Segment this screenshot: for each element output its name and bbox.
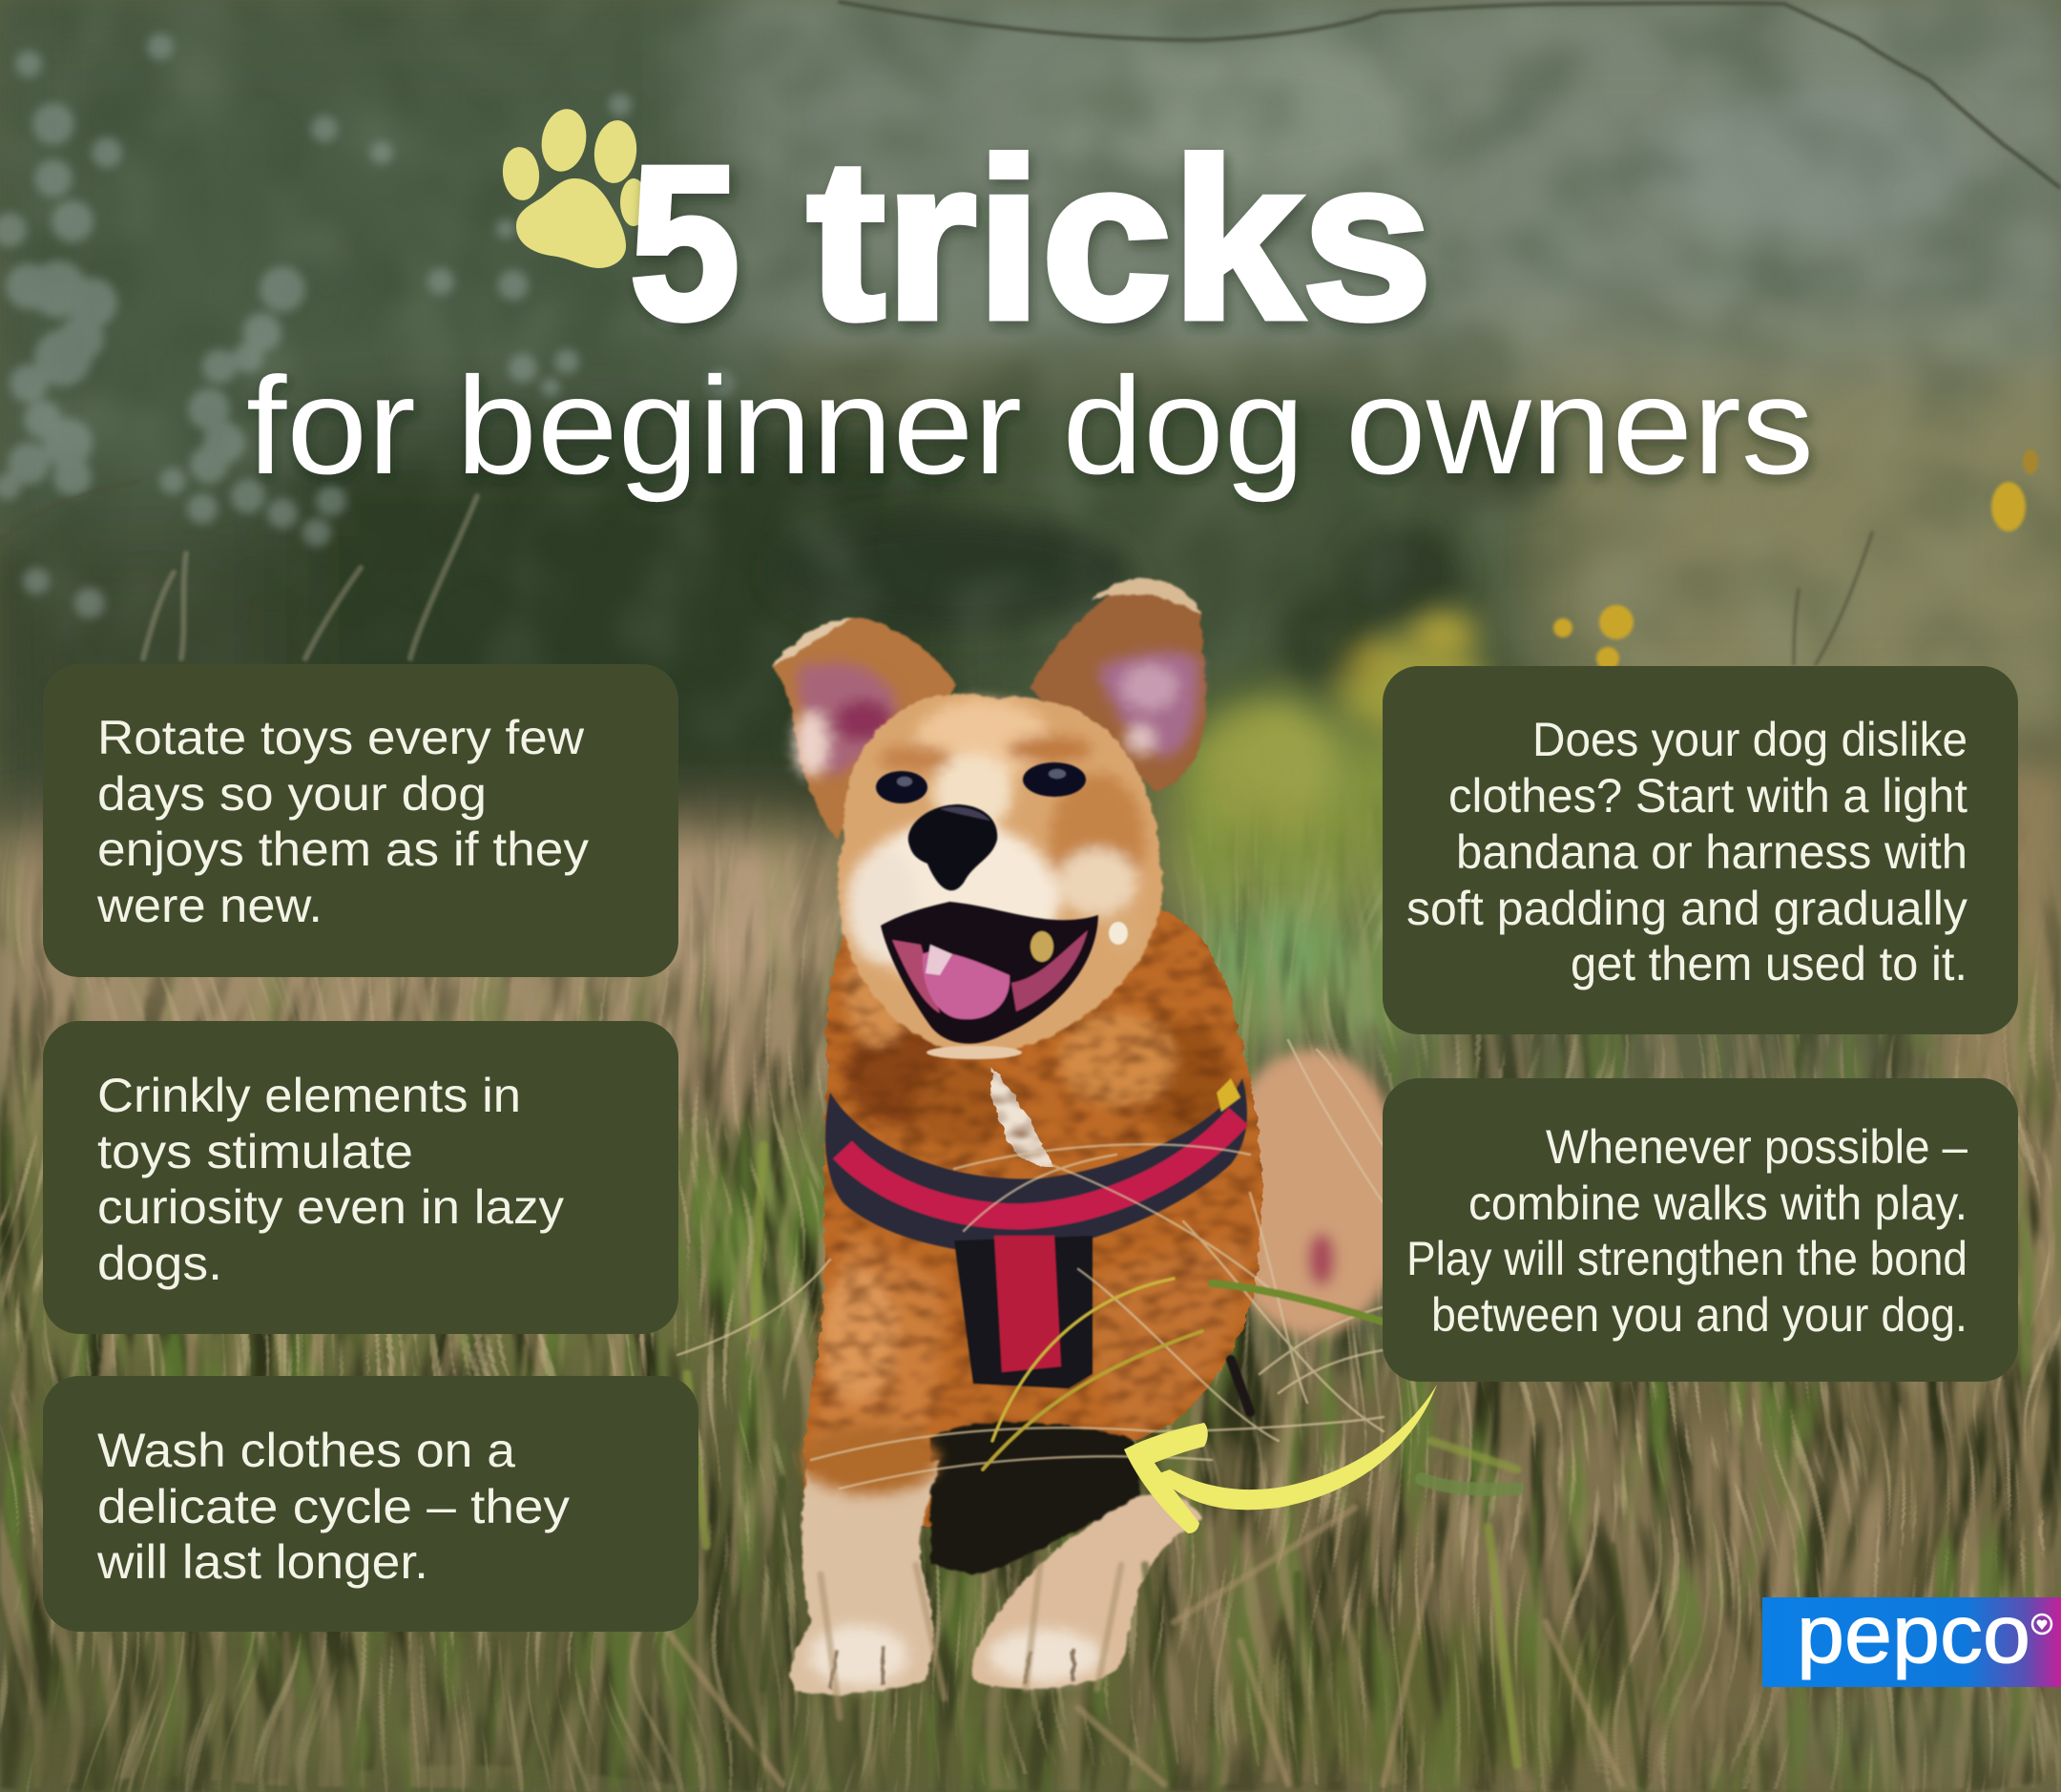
text: tip 3: Wash clothes on a: [97, 1424, 515, 1477]
text: tip 2: Crinkly elements in: [97, 1069, 521, 1122]
logo: pepco: [1762, 1589, 2061, 1687]
decorative twigs and flowers: [0, 2, 2059, 670]
foreground grass: [668, 1145, 1641, 1784]
text: tip 1: enjoys them as if they: [97, 823, 589, 876]
dog head: [838, 694, 1162, 1054]
text: tip 2: toys stimulate: [97, 1125, 413, 1178]
text: tip 4: clothes? Start with a light: [1448, 769, 1967, 823]
dog photo: [772, 577, 1407, 1695]
decorative meadow grass texture: [0, 782, 2061, 1792]
dog hind body: [1217, 1050, 1407, 1336]
decorative bokeh: [0, 33, 734, 618]
text: tip 5: combine walks with play.: [1468, 1177, 1967, 1230]
title: 5 tricks: 5: [630, 122, 739, 365]
icon: paw print: [500, 106, 647, 268]
dog mouth and tongue: [881, 902, 1128, 1059]
text: tip 5: Whenever possible –: [1546, 1120, 1967, 1174]
panel: tip 1 rotate toys: [43, 664, 678, 977]
text: tip 3: delicate cycle – they: [97, 1480, 570, 1533]
dog nose: [908, 804, 997, 890]
panel: tip 3 wash clothes: [43, 1376, 698, 1632]
text: tip 1: days so your dog: [97, 767, 487, 821]
text: tip 1: Rotate toys every few: [97, 711, 585, 764]
text: tip 2: curiosity even in lazy: [97, 1180, 564, 1234]
panel: tip 2 crinkly elements: [43, 1021, 678, 1334]
text: tip 4: Does your dog dislike: [1532, 713, 1967, 766]
text: tip 5: Play will strengthen the bond: [1406, 1232, 1967, 1285]
foreground thin grass stems: [677, 1040, 1517, 1490]
text: tip 2: dogs.: [97, 1237, 222, 1290]
dog harness: [825, 1078, 1247, 1388]
dog ears: [772, 577, 1206, 840]
text: tip 5: between you and your dog.: [1431, 1288, 1967, 1342]
arrow: yellow curved arrow pointing at dog: [1124, 1385, 1437, 1533]
title: 5 tricks: tricks: [807, 114, 1432, 366]
text: tip 1: were new.: [96, 879, 323, 932]
dog body: [804, 906, 1262, 1527]
dog legs and paws: [791, 1422, 1202, 1695]
panel: tip 4 dog clothes: [1383, 666, 2018, 1034]
logo: pepco: pepco: [1797, 1589, 2030, 1680]
text: tip 3: will last longer.: [96, 1535, 428, 1589]
dog eyes: [876, 762, 1086, 803]
panel: tip 5 walks with play: [1383, 1078, 2018, 1382]
text: tip 4: get them used to it.: [1571, 937, 1967, 990]
subtitle: for beginner dog owners: for beginner dog owners: [246, 348, 1814, 503]
text: tip 4: soft padding and gradually: [1406, 882, 1967, 935]
text: tip 4: bandana or harness with: [1456, 825, 1967, 879]
